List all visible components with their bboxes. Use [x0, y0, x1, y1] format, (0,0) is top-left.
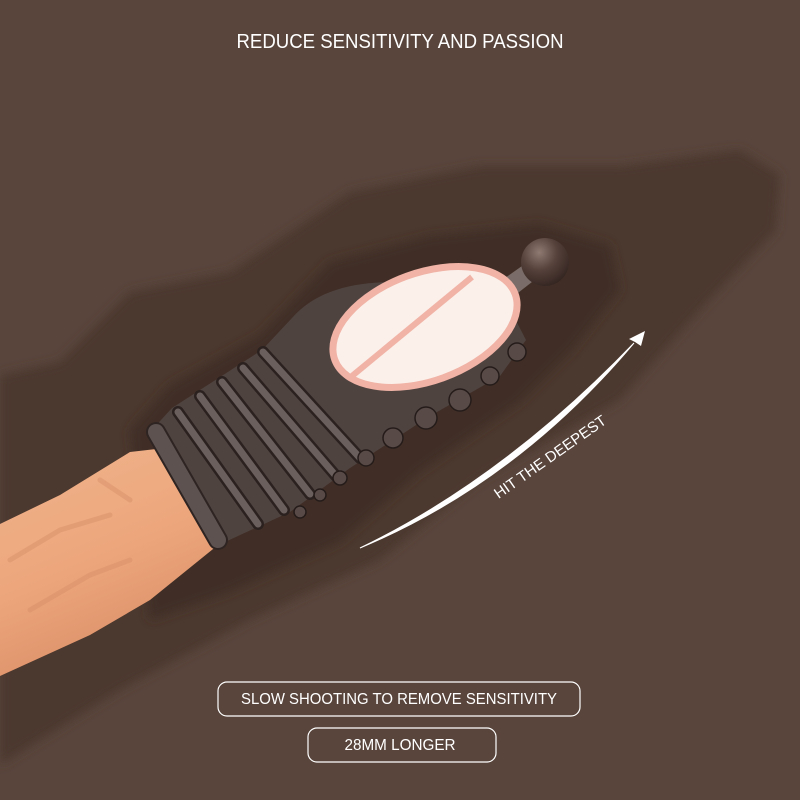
sleeve ridges [178, 352, 360, 524]
sleeve collar [156, 432, 218, 540]
arrow [360, 331, 645, 548]
product shaft [0, 448, 218, 676]
sleeve body [150, 282, 526, 548]
title: REDUCE SENSITIVITY AND PASSION [236, 31, 564, 53]
pill: 28mm longer [308, 728, 496, 762]
censor mask [316, 243, 534, 411]
sleeve beads [294, 343, 526, 518]
shadow: inner cavity [130, 224, 620, 620]
pill: slow shooting [218, 682, 580, 716]
arrow label: HIT THE DEEPEST [491, 412, 610, 502]
shadow: outer cavity [0, 150, 780, 765]
product sleeve [150, 282, 526, 548]
sleeve tip ball [521, 238, 569, 286]
sleeve tip stem [505, 266, 532, 296]
pill: slow shooting: SLOW SHOOTING TO REMOVE SENSITIVITY [241, 691, 557, 708]
pill: 28mm longer: 28MM LONGER [344, 737, 456, 754]
